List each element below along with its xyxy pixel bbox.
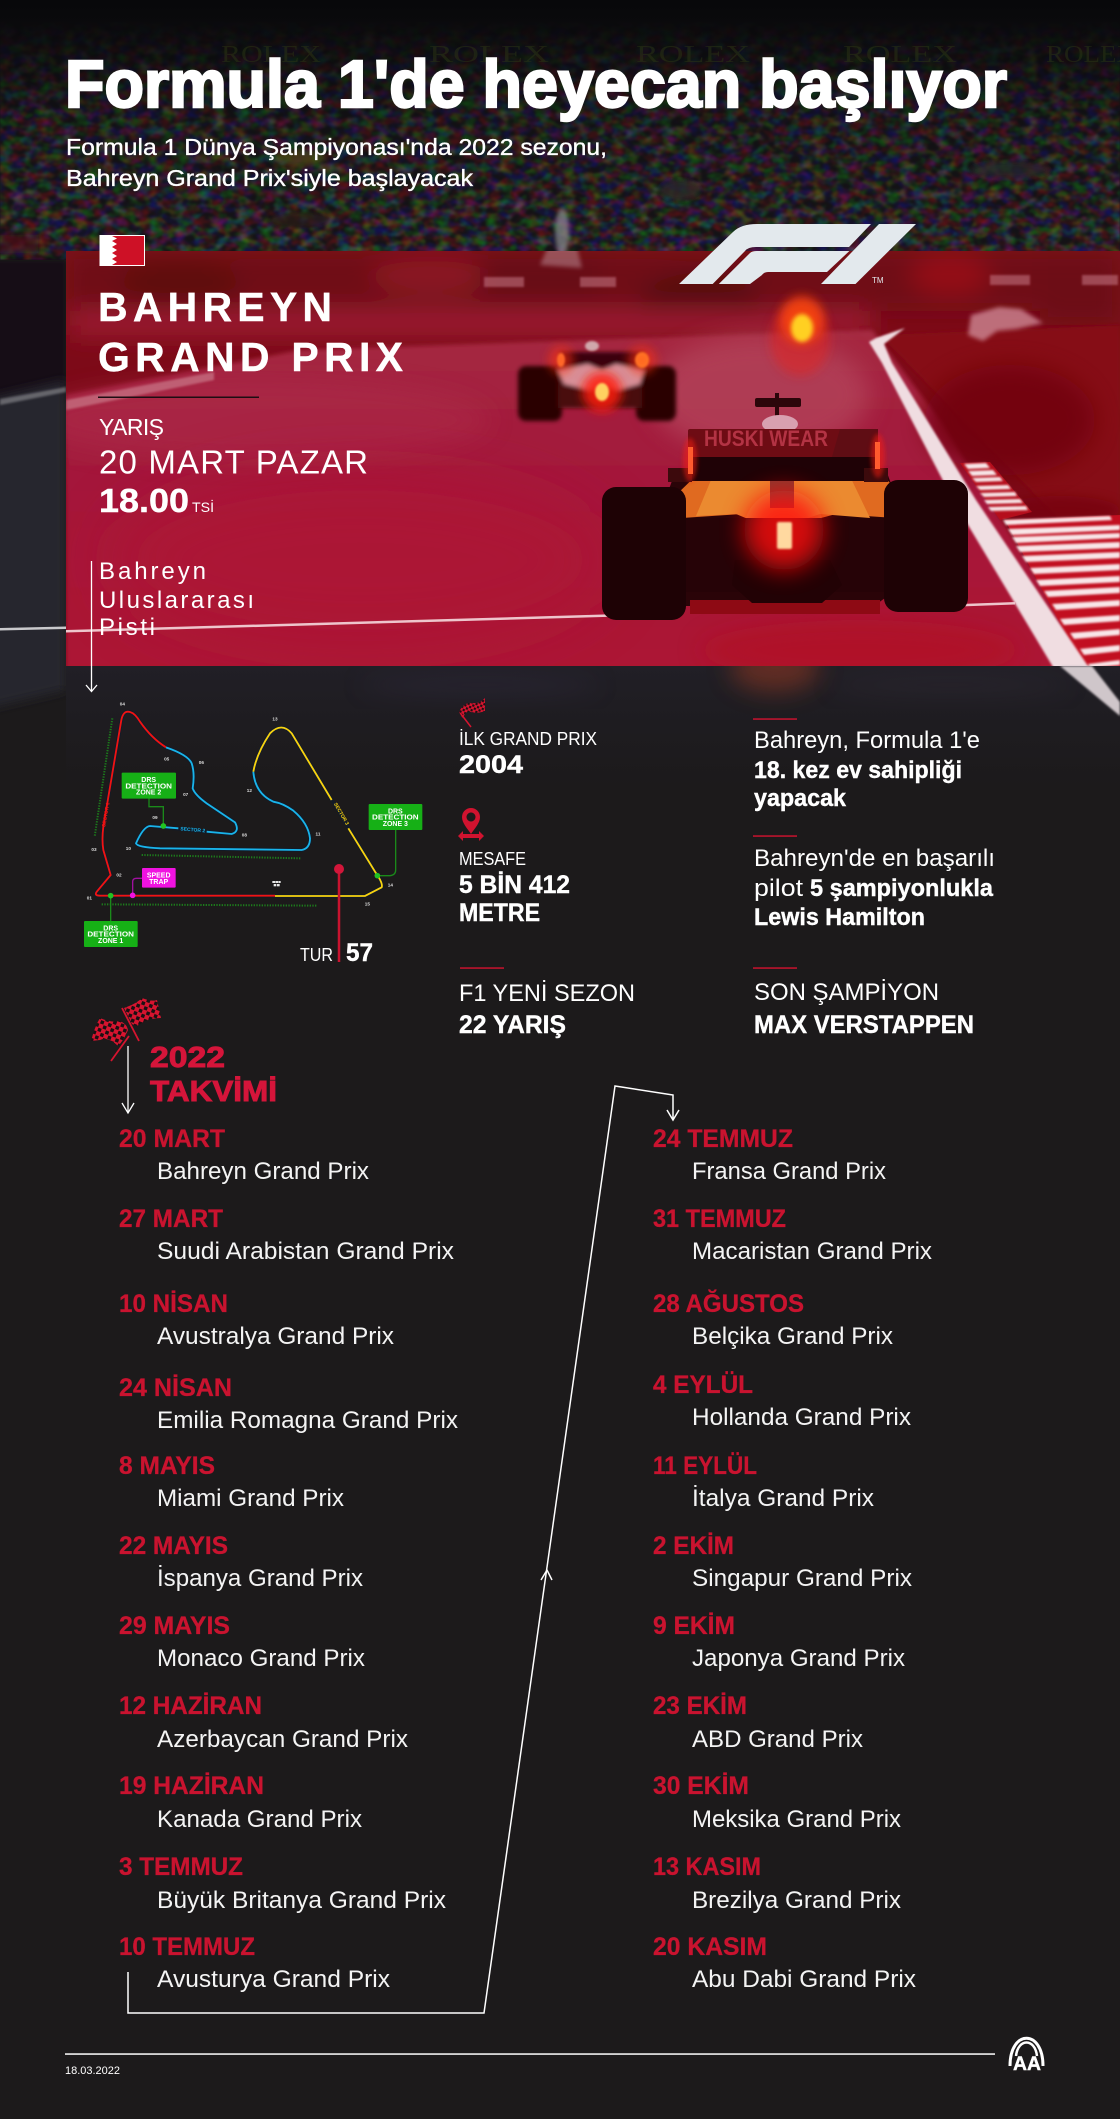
icon: AA logo: AA: [1013, 2054, 1041, 2075]
fact: hosting: Bahreyn, Formula 1'e: [754, 727, 980, 754]
calendar: left column: 22 MAYIS: [119, 1532, 228, 1560]
calendar: right column: Meksika Grand Prix: [692, 1806, 901, 1833]
circuit map: SECTOR 3: [332, 802, 350, 827]
calendar: right column: Macaristan Grand Prix: [692, 1238, 932, 1265]
calendar: left column: Azerbaycan Grand Prix: [157, 1726, 408, 1753]
line across lower left of hero: [0, 626, 66, 630]
calendar: left column: 8 MAYIS: [119, 1452, 215, 1480]
circuit map: 06: [199, 760, 204, 765]
calendar: left column: 3 TEMMUZ: [119, 1853, 243, 1881]
calendar: right column: 20 KASIM: [653, 1933, 767, 1961]
circuit map: ZONE 2: [136, 790, 161, 797]
circuit map: ZONE 3: [383, 821, 408, 828]
text: circuit name: [99, 558, 254, 641]
text: race date: YARIŞ: [99, 414, 164, 440]
calendar: left column: [119, 1125, 458, 1993]
circuit map: DRS: [141, 777, 156, 784]
stat: distance: METRE: [459, 899, 540, 927]
fact: most successful driver: Bahreyn'de en başarılı: [754, 845, 995, 872]
heading: 2022 takvimi: TAKVİMİ: [150, 1076, 277, 1108]
calendar: right column: [653, 1125, 932, 1993]
circuit map: 01: [87, 896, 92, 901]
panel: red hero photo: [30, 226, 1120, 680]
lap count: [300, 864, 373, 967]
heading: Bahreyn Grand Prix: BAHREYN: [98, 284, 332, 330]
circuit map: 12: [247, 788, 252, 793]
circuit map: 09: [152, 815, 158, 820]
heading: 2022 takvimi: 2022: [150, 1042, 225, 1074]
circuit map: 03: [91, 847, 97, 852]
stat: first grand prix: İLK GRAND PRIX: [459, 729, 597, 749]
circuit map: DETECTION: [372, 815, 419, 822]
background photo: track and cars: ROLEX: [429, 42, 549, 68]
circuit map: SECTOR 1: [101, 802, 111, 828]
text: race date: 18.00: [99, 482, 189, 519]
circuit map: DRS: [388, 808, 403, 815]
background photo: track and cars: [0, 0, 1120, 786]
subtitle: Bahreyn Grand Prix'siyle başlayacak: [66, 165, 474, 191]
circuit map: 15: [365, 902, 370, 907]
circuit map: 14: [388, 883, 393, 888]
calendar: right column: ABD Grand Prix: [692, 1726, 863, 1753]
calendar: right column: İtalya Grand Prix: [692, 1485, 874, 1512]
fact: hosting: [753, 718, 980, 812]
fact: last champion: SON ŞAMPİYON: [754, 979, 939, 1006]
circuit map: [84, 701, 422, 947]
circuit map: SPEED: [147, 872, 171, 879]
stat: distance: MESAFE: [459, 849, 526, 869]
icon: AA logo: [1010, 2038, 1043, 2075]
calendar: right column: Singapur Grand Prix: [692, 1565, 912, 1592]
calendar: left column: 20 MART: [119, 1125, 225, 1153]
text: race date: [99, 414, 368, 519]
subtitle: Formula 1 Dünya Şampiyonası'nda 2022 sezonu,: [66, 134, 607, 160]
arrow: calendar continues to second column: [128, 1086, 679, 2013]
calendar: left column: Emilia Romagna Grand Prix: [157, 1407, 458, 1434]
fact: most successful driver: pilot: [754, 875, 803, 902]
calendar: right column: 31 TEMMUZ: [653, 1205, 786, 1233]
stat: first grand prix: [459, 698, 597, 779]
icon: crossed checkered flags: [91, 998, 161, 1061]
heading: Bahreyn Grand Prix: GRAND PRIX: [98, 334, 403, 380]
circuit map: 02: [116, 873, 122, 878]
stat: season: 22 YARIŞ: [459, 1011, 566, 1039]
circuit map: 10: [126, 846, 131, 851]
calendar: left column: 24 NİSAN: [119, 1374, 232, 1402]
stat: distance: 5 BİN 412: [459, 871, 570, 899]
circuit map: DETECTION: [125, 783, 172, 790]
calendar: right column: Abu Dabi Grand Prix: [692, 1966, 916, 1993]
background photo: track and cars: ROLEX: [636, 42, 750, 68]
calendar: left column: Bahreyn Grand Prix: [157, 1158, 369, 1185]
calendar: right column: 13 KASIM: [653, 1853, 761, 1881]
circuit map: TRAP: [149, 879, 169, 886]
calendar: right column: Hollanda Grand Prix: [692, 1404, 911, 1431]
fact: hosting: 18. kez ev sahipliği: [754, 757, 962, 784]
calendar: right column: Fransa Grand Prix: [692, 1158, 886, 1185]
stat: distance: [458, 808, 570, 927]
stat: season: [459, 967, 635, 1039]
calendar: left column: Kanada Grand Prix: [157, 1806, 362, 1833]
subtitle: [66, 134, 607, 191]
calendar: left column: 12 HAZİRAN: [119, 1692, 262, 1720]
title: Formula 1'de heyecan başlıyor: [65, 47, 1007, 122]
calendar: left column: Monaco Grand Prix: [157, 1645, 365, 1672]
icon: pin with arrow: [458, 808, 484, 841]
heading: 2022 takvimi: [150, 1042, 277, 1108]
track white line below panel: [1060, 666, 1120, 716]
beacon light: [770, 296, 830, 376]
calendar: right column: 23 EKİM: [653, 1692, 747, 1720]
fact: hosting: yapacak: [754, 785, 847, 812]
fact: most successful driver: 5 şampiyonlukla: [810, 875, 994, 902]
calendar: left column: Miami Grand Prix: [157, 1485, 344, 1512]
icon: F1 logo: [679, 224, 916, 285]
calendar: left column: 27 MART: [119, 1205, 223, 1233]
calendar: right column: 24 TEMMUZ: [653, 1125, 793, 1153]
calendar: right column: 2 EKİM: [653, 1532, 734, 1560]
calendar: left column: Büyük Britanya Grand Prix: [157, 1887, 446, 1914]
calendar: right column: Brezilya Grand Prix: [692, 1887, 901, 1914]
text: circuit name: Bahreyn: [99, 558, 206, 585]
calendar: left column: Suudi Arabistan Grand Prix: [157, 1238, 454, 1265]
lap count: TUR: [300, 945, 333, 965]
calendar: right column: 30 EKİM: [653, 1772, 749, 1800]
calendar: left column: 29 MAYIS: [119, 1612, 230, 1640]
calendar: right column: 9 EKİM: [653, 1612, 735, 1640]
circuit map: DRS: [103, 925, 118, 932]
icon: F1 logo: TM: [872, 276, 884, 285]
text: circuit name: Pisti: [99, 614, 155, 641]
near car: [602, 393, 968, 620]
calendar: right column: 4 EYLÜL: [653, 1370, 753, 1399]
divider: [98, 396, 259, 398]
calendar: right column: Belçika Grand Prix: [692, 1323, 893, 1350]
arrow: calendar start: [122, 1046, 134, 1113]
calendar: left column: Avustralya Grand Prix: [157, 1323, 394, 1350]
circuit map: 04: [120, 701, 125, 706]
circuit map: DETECTION: [87, 932, 134, 939]
icon: checkered flag: [459, 698, 485, 727]
far car: [518, 352, 676, 421]
calendar: left column: 10 TEMMUZ: [119, 1933, 255, 1961]
calendar: right column: 28 AĞUSTOS: [653, 1289, 804, 1318]
date: 18.03.2022: [65, 2065, 120, 2077]
arrow: circuit name to map: [86, 561, 97, 692]
circuit map: 13: [272, 716, 278, 721]
lap count: 57: [346, 939, 373, 967]
background photo: track and cars: ROLEX: [221, 42, 321, 68]
circuit map: ZONE 1: [98, 938, 123, 945]
stat: first grand prix: 2004: [459, 751, 523, 779]
text: circuit name: Uluslararası: [99, 587, 254, 614]
text: race date: 20 MART PAZAR: [99, 444, 368, 480]
calendar: left column: İspanya Grand Prix: [157, 1565, 363, 1592]
calendar: right column: Japonya Grand Prix: [692, 1645, 905, 1672]
fact: most successful driver: [753, 835, 995, 931]
circuit map: 07: [183, 792, 189, 797]
circuit map: SECTOR 2: [180, 826, 206, 834]
calendar: left column: 19 HAZİRAN: [119, 1772, 264, 1800]
fact: last champion: MAX VERSTAPPEN: [754, 1011, 974, 1039]
heading: Bahreyn Grand Prix: [98, 284, 403, 380]
text: race date: TSİ: [192, 498, 214, 515]
circuit map: 11: [316, 832, 321, 837]
calendar: left column: 10 NİSAN: [119, 1290, 228, 1318]
calendar: right column: 11 EYLÜL: [653, 1451, 757, 1480]
circuit map: 08: [242, 832, 247, 837]
footer line: [65, 2053, 995, 2055]
calendar: left column: Avusturya Grand Prix: [157, 1966, 390, 1993]
circuit map: 05: [164, 756, 170, 761]
stat: season: F1 YENİ SEZON: [459, 980, 635, 1007]
fact: most successful driver: Lewis Hamilton: [754, 904, 925, 931]
fact: last champion: [753, 967, 974, 1039]
background photo: track and cars: ROLEX: [843, 42, 957, 68]
icon: Bahrain flag: [100, 235, 145, 266]
near car: HUSKI WEAR: [704, 426, 828, 451]
